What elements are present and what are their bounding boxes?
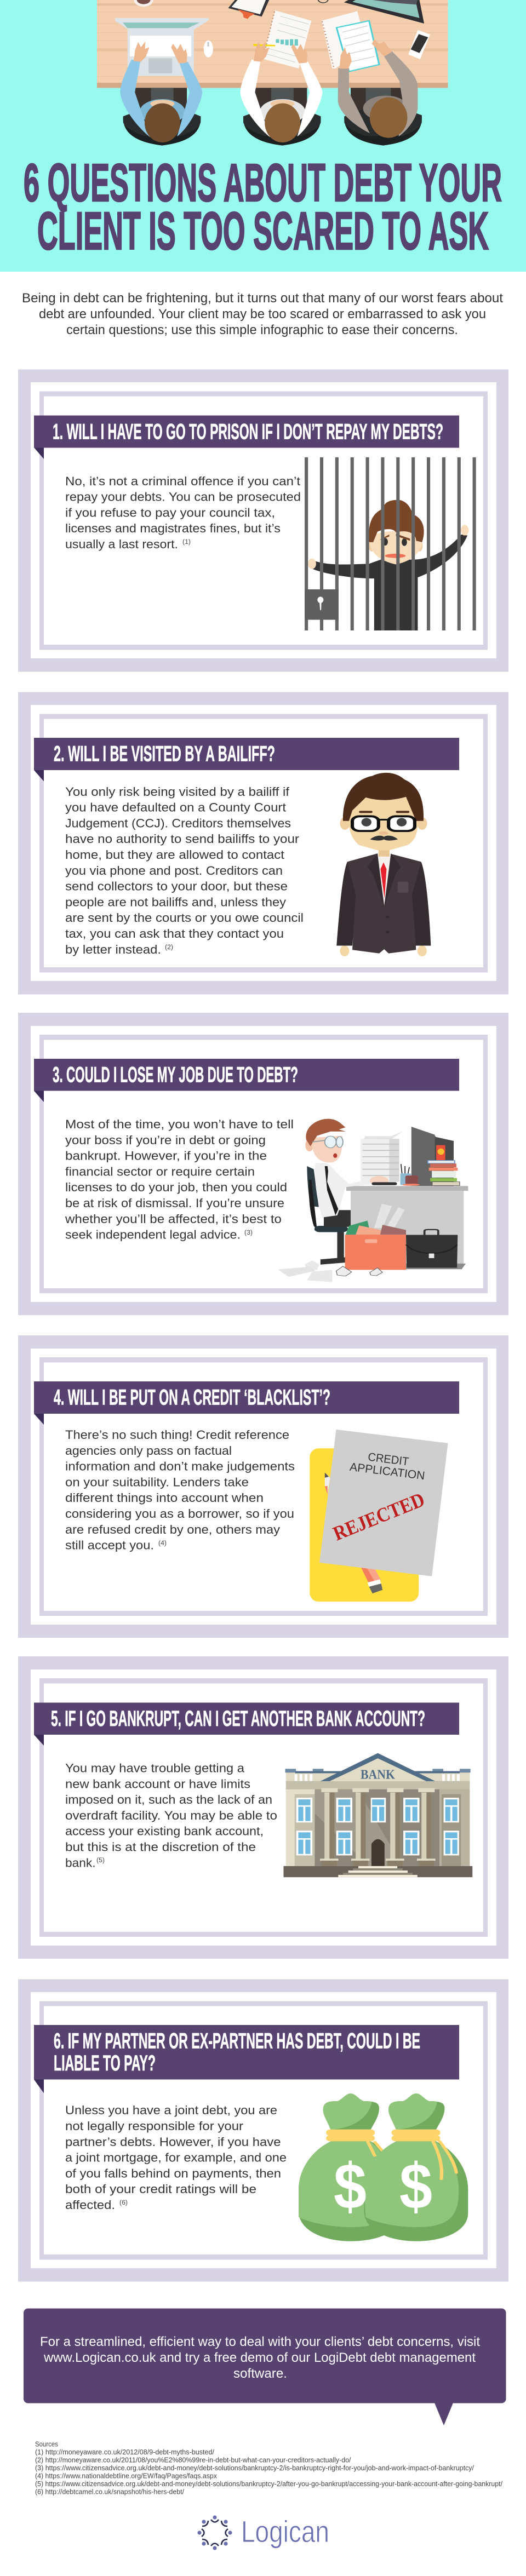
callout: call to action speech bubble: software. — [233, 2366, 287, 2381]
intro text — [22, 291, 503, 337]
panel: question 1 prison — [18, 369, 508, 672]
banner: question 6 heading — [34, 2025, 459, 2093]
illustration: rejected credit application: APPLICATION — [349, 1461, 426, 1482]
text: answer 2: (2) — [165, 944, 173, 951]
text: answer 6: a joint mortgage, for example, and one — [65, 2151, 287, 2165]
text: answer 3: licenses to do your job, then you could — [65, 1180, 287, 1194]
text: answer 2: people are not bailiffs and, unless they — [65, 895, 287, 909]
text: answer 5: (5) — [96, 1857, 105, 1864]
illustration: two money bags: $ — [399, 2150, 432, 2223]
text: answer 6: affected. — [65, 2198, 115, 2212]
text: answer 1: if you refuse to pay your council tax, — [65, 506, 275, 519]
text: answer 1: (1) — [182, 539, 191, 546]
text: sources: Sources — [35, 2441, 58, 2448]
text: sources: (6) http://debtcamel.co.uk/snapshot/his-hers-debt/ — [35, 2488, 185, 2496]
text: answer 5 — [65, 1762, 277, 1869]
intro text: debt are unfounded. Your client may be too scared or embarrassed to ask you — [39, 307, 486, 322]
icon: Logican star mark — [197, 2515, 232, 2550]
illustration: rejected credit application — [310, 1430, 448, 1602]
illustration: rejected credit application: REJECTED — [330, 1488, 428, 1545]
banner: question 5 heading — [34, 1702, 459, 1746]
text: answer 2: home, but they are allowed to contact — [65, 848, 285, 862]
panel: question 4 credit blacklist — [18, 1335, 508, 1638]
logo: Logican — [197, 2514, 329, 2550]
text: answer 3: Most of the time, you won’t have to tell — [65, 1117, 294, 1131]
text: answer 5: but this is at the discretion of the — [65, 1840, 256, 1854]
banner: question 2 heading — [34, 738, 459, 781]
text: answer 2: are sent by the courts or you owe council — [65, 911, 304, 925]
illustration: rejected credit application: CREDIT — [367, 1451, 410, 1468]
text: sources — [35, 2441, 503, 2496]
text: answer 1: usually a last resort. — [65, 537, 178, 551]
text: answer 2: you have defaulted on a County Court — [65, 801, 287, 814]
text: answer 6: not legally responsible for your — [65, 2119, 244, 2133]
text: answer 4 — [65, 1428, 295, 1552]
text: answer 3: seek independent legal advice. — [65, 1228, 241, 1242]
panel: question 2 bailiff — [18, 692, 508, 995]
banner: question 2 heading: 2. WILL I BE VISITED BY A BAILIFF? — [54, 742, 275, 766]
text: answer 3 — [65, 1117, 294, 1242]
text: answer 5: imposed on it, such as the lack of an — [65, 1793, 272, 1806]
text: sources: (3) https://www.citizensadvice.org.uk/debt-and-money/debt-solutions/bankruptcy-2/is-bankruptcy-right-for-you/job-and-work-impact-of-bankruptcy/ — [35, 2464, 474, 2472]
text: answer 2 — [65, 785, 304, 956]
banner: question 6 heading: LIABLE TO PAY? — [54, 2051, 156, 2075]
illustration: bailiff in a suit — [336, 773, 431, 956]
illustration: two money bags: $ — [334, 2150, 367, 2223]
illustration: two money bags — [299, 2093, 468, 2241]
text: answer 4: There’s no such thing! Credit reference — [65, 1428, 289, 1442]
text: answer 1: repay your debts. You can be prosecuted — [65, 490, 301, 504]
text: answer 2: tax, you can ask that they contact you — [65, 927, 284, 940]
text: answer 4: are refused credit by one, others may — [65, 1523, 281, 1536]
banner: question 4 heading — [34, 1381, 459, 1425]
text: answer 4: (4) — [158, 1540, 167, 1547]
text: sources: (5) https://www.citizensadvice.org.uk/debt-and-money/debt-solutions/bankruptcy-2/after-you-go-bankrupt/accessing-your-bank-account-after-going-bankrupt/ — [35, 2480, 503, 2488]
text: answer 6: Unless you have a joint debt, you are — [65, 2103, 277, 2117]
header panel — [0, 0, 526, 272]
text: answer 6: partner’s debts. However, if you have — [65, 2135, 281, 2149]
panel: question 5 bank account — [18, 1656, 508, 1959]
text: answer 2: You only risk being visited by a bailiff if — [65, 785, 290, 799]
text: answer 6 — [65, 2103, 287, 2212]
text: answer 6: of you falls behind on payments, then — [65, 2166, 281, 2180]
text: answer 4: on your suitability. Lenders take — [65, 1475, 249, 1489]
text: answer 3: be at risk of dismissal. If you’re unsure — [65, 1196, 284, 1210]
text: answer 2: Judgement (CCJ). Creditors themselves — [65, 816, 291, 830]
text: answer 1: No, it’s not a criminal offence if you can’t — [65, 474, 301, 488]
illustration: three people working at a desk — [97, 0, 448, 146]
illustration: bank building — [283, 1753, 472, 1877]
text: sources: (2) http://moneyaware.co.uk/2011/08/you%E2%80%99re-in-debt-but-what-can-your-creditors-actually-do/ — [35, 2457, 351, 2464]
text: answer 2: by letter instead. — [65, 943, 161, 956]
text: answer 4: different things into account when — [65, 1491, 264, 1505]
callout: call to action speech bubble — [24, 2308, 506, 2425]
text: sources: (1) http://moneyaware.co.uk/2012/08/9-debt-myths-busted/ — [35, 2448, 215, 2456]
illustration: office worker at a messy desk — [278, 1119, 468, 1282]
callout: call to action speech bubble: www.Logican.co.uk and try a free demo of our LogiDebt debt management — [43, 2350, 476, 2365]
text: answer 5: bank. — [65, 1856, 95, 1869]
text: answer 4: agencies only pass on factual — [65, 1444, 232, 1458]
text: answer 6: both of your credit ratings will be — [65, 2182, 256, 2196]
text: answer 4: still accept you. — [65, 1539, 154, 1552]
text: answer 4: information and don’t make judgements — [65, 1460, 295, 1473]
text: answer 3: financial sector or require certain — [65, 1164, 255, 1178]
text: answer 3: whether you’ll be affected, it’s best to — [65, 1212, 282, 1226]
text: answer 5: You may have trouble getting a — [65, 1762, 245, 1775]
text: answer 1: licenses and magistrates fines, but it’s — [65, 521, 281, 535]
logo: Logican: Logican — [241, 2514, 329, 2549]
text: answer 3: your boss if you’re in debt or going — [65, 1133, 266, 1147]
text: answer 3: bankrupt. However, if you’re in the — [65, 1149, 267, 1163]
text: answer 4: considering you as a borrower, so if you — [65, 1507, 294, 1521]
text: answer 5: overdraft facility. You may be able to — [65, 1809, 277, 1822]
title — [24, 153, 502, 261]
illustration: bank building: BANK — [361, 1768, 395, 1782]
text: answer 2: have no authority to send bailiffs to your — [65, 832, 300, 846]
illustration: person behind prison bars — [305, 457, 476, 630]
panel: question 3 job — [18, 1013, 508, 1315]
text: answer 5: access your existing bank account, — [65, 1825, 264, 1838]
banner: question 4 heading: 4. WILL I BE PUT ON A CREDIT ‘BLACKLIST’? — [54, 1386, 330, 1410]
text: answer 6: (6) — [119, 2200, 128, 2206]
banner: question 3 heading: 3. COULD I LOSE MY JOB DUE TO DEBT? — [53, 1063, 298, 1087]
text: answer 3: (3) — [244, 1230, 253, 1236]
text: answer 2: send collectors to your door, but these — [65, 880, 288, 893]
text: answer 5: new bank account or have limits — [65, 1777, 250, 1791]
callout: call to action speech bubble: For a streamlined, efficient way to deal with your clients’ debt concerns, visit — [40, 2334, 480, 2349]
panel: question 6 partner debt — [18, 1980, 508, 2282]
text: answer 1 — [65, 474, 301, 551]
text: sources: (4) https://www.nationaldebtline.org/EW/faq/Pages/faqs.aspx — [35, 2472, 218, 2480]
banner: question 1 heading — [34, 415, 459, 459]
intro text: certain questions; use this simple infographic to ease their concerns. — [66, 323, 458, 337]
banner: question 3 heading — [34, 1059, 459, 1102]
text: answer 2: you via phone and post. Creditors can — [65, 864, 283, 877]
intro text: Being in debt can be frightening, but it turns out that many of our worst fears about — [22, 291, 503, 306]
